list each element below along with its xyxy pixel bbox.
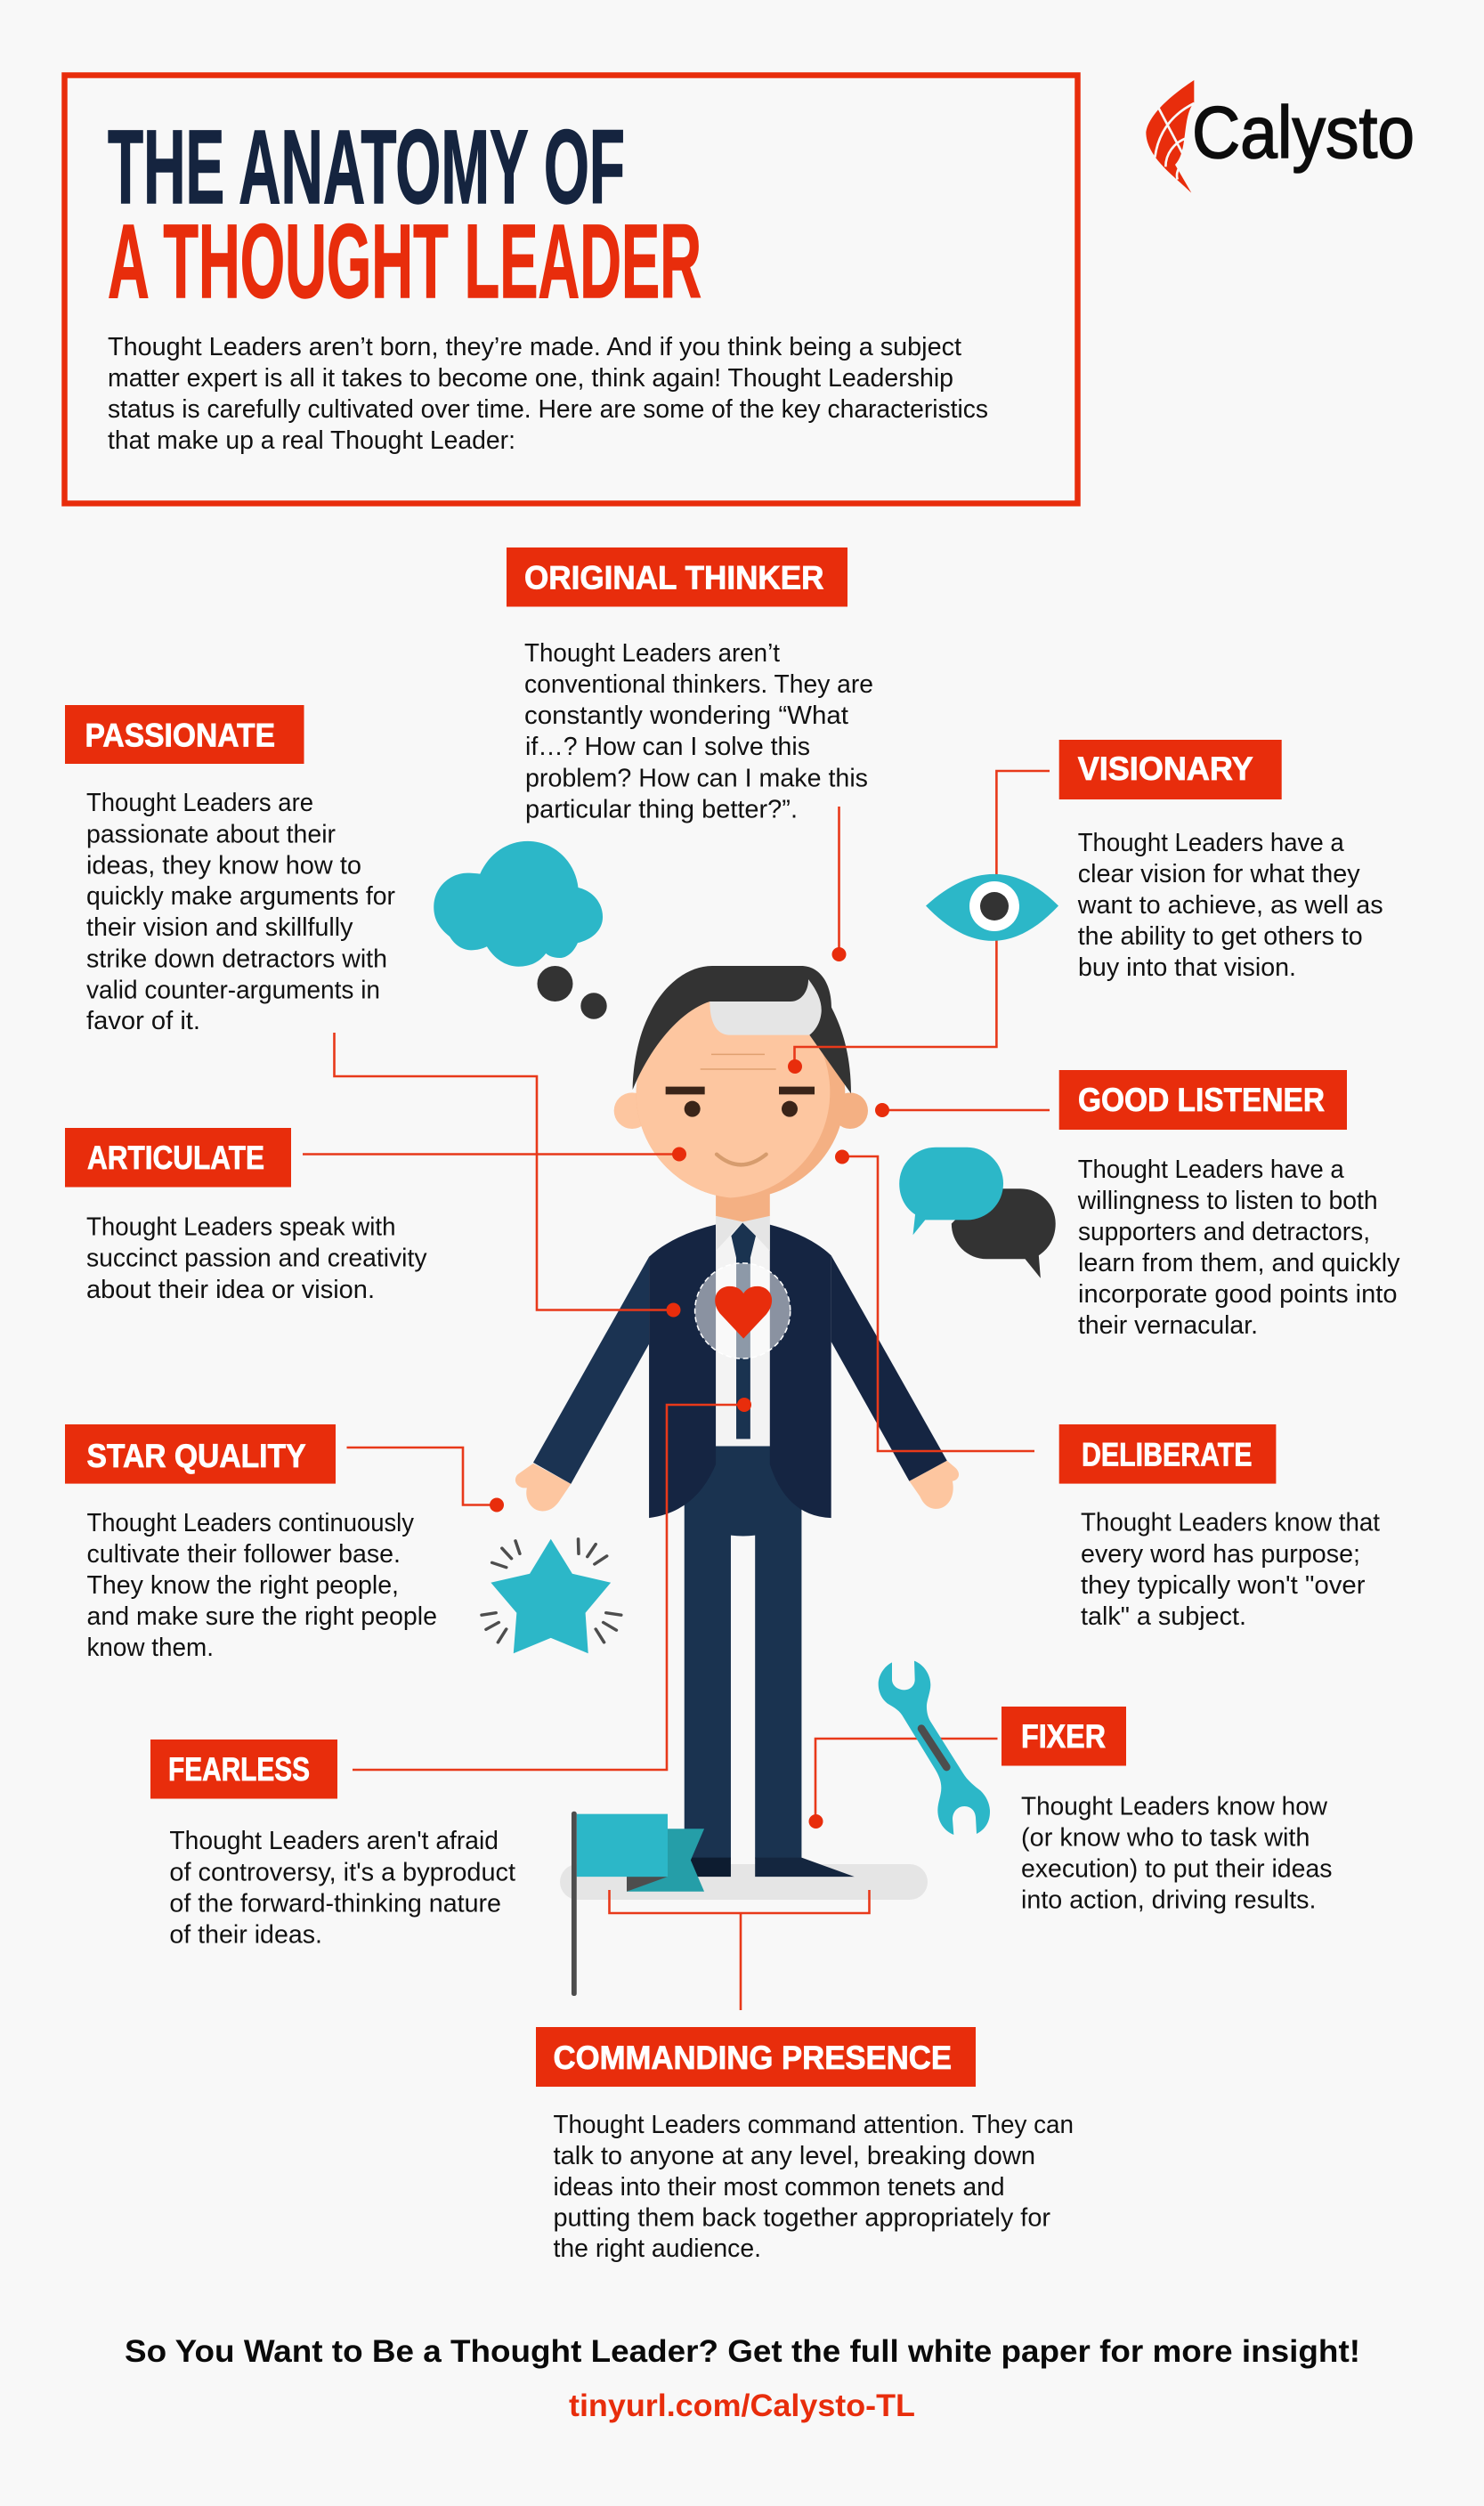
panel: original thinker [507,547,873,824]
text: want to achieve, as well as [1077,891,1383,920]
text [524,639,873,824]
line: deliberate [835,1150,1034,1451]
text: ideas, they know how to [86,851,361,880]
icon: flag [572,1812,704,1996]
footer call to action: So You Want to Be a Thought Leader? Get the full white paper for more insight! [125,2334,1360,2369]
icon: eye [926,874,1058,941]
heading [1059,1070,1347,1130]
text [1081,1508,1380,1631]
icon: heart [715,1286,772,1339]
panel: visionary [1059,740,1383,982]
text: learn from them, and quickly [1078,1249,1400,1277]
heading: ORIGINAL THINKER [524,559,824,596]
heading: PASSIONATE [85,718,275,753]
footer link: tinyurl.com/Calysto-TL [569,2388,915,2423]
text: particular thing better?”. [525,796,798,824]
text: (or know who to task with [1021,1823,1310,1852]
text [1021,1793,1332,1914]
title: A THOUGHT LEADER [108,203,701,320]
line: passionate [335,1033,680,1318]
panel: commanding presence [536,2027,1074,2263]
text: favor of it. [86,1007,200,1035]
text: the right audience. [554,2234,761,2263]
text: putting them back together appropriately for [554,2204,1050,2233]
text: talk" a subject. [1081,1602,1246,1631]
heading: COMMANDING PRESENCE [554,2040,952,2076]
text: constantly wondering “What [524,702,848,730]
suit [515,1188,959,1518]
text: Thought Leaders speak with [86,1212,395,1241]
text: every word has purpose; [1081,1540,1360,1569]
panel: good listener [1059,1070,1400,1340]
text [554,2111,1074,2263]
text: their vernacular. [1078,1311,1258,1340]
text [169,1827,515,1950]
face [636,1002,846,1198]
line: good listener [875,1103,1050,1117]
text: ideas into their most common tenets and [554,2173,1004,2202]
heading [1059,1424,1276,1484]
text: into action, driving results. [1021,1886,1316,1914]
line: original thinker [831,807,846,961]
intro text [108,333,988,455]
left arm [533,1257,649,1484]
shirt [716,1216,770,1446]
jacket [649,1225,831,1518]
text: cultivate their follower base. [87,1540,401,1569]
text: their vision and skillfully [86,913,353,942]
panel: fixer [1001,1707,1332,1914]
logo: Calysto [1192,91,1415,174]
line: fixer [808,1739,997,1829]
text: willingness to listen to both [1077,1187,1378,1215]
text [1077,829,1383,982]
panel: fearless [150,1740,515,1950]
text [1077,1156,1400,1340]
heading: FIXER [1021,1718,1106,1755]
icon: wrench [879,1661,990,1835]
trousers and shoes [644,1440,855,1877]
heart highlight [695,1263,791,1358]
intro text: that make up a real Thought Leader: [108,426,515,455]
text: Thought Leaders aren’t [524,639,780,668]
text: passionate about their [86,821,336,849]
ground shadow [560,1864,928,1900]
title [108,109,701,320]
panel: articulate [65,1128,427,1304]
text: supporters and detractors, [1078,1218,1370,1246]
icon: speech bubbles [899,1148,1056,1278]
logo [1146,80,1415,193]
text: buy into that vision. [1078,953,1296,982]
tie [731,1222,756,1439]
hair [633,966,851,1093]
heading: STAR QUALITY [87,1438,306,1474]
icon: star [482,1539,621,1653]
smile [717,1155,766,1164]
heading: DELIBERATE [1082,1437,1252,1472]
text: if…? How can I solve this [525,733,810,761]
left hand [515,1464,571,1511]
eyebrows [666,1087,815,1094]
title: THE ANATOMY OF [108,109,625,226]
heading [507,547,847,607]
text: Thought Leaders know how [1021,1793,1328,1821]
heading: ARTICULATE [87,1139,264,1176]
text: execution) to put their ideas [1021,1855,1332,1884]
line: star quality [347,1448,504,1512]
text: Thought Leaders aren't afraid [169,1827,499,1855]
header panel [64,75,1077,504]
forehead lines [701,1054,776,1069]
heading [65,705,304,764]
text: Thought Leaders have a [1078,1156,1345,1184]
text: and make sure the right people [87,1602,437,1631]
intro text: status is carefully cultivated over time. Here are some of the key characteristics [108,395,988,424]
text: They know the right people, [87,1571,399,1600]
text: valid counter-arguments in [86,976,380,1004]
panel: star quality [65,1424,437,1662]
text [86,1212,427,1304]
figure: thought leader [515,966,959,1900]
icon: thought cloud [434,841,607,1019]
text: quickly make arguments for [86,882,395,911]
text: of controversy, it's a byproduct [169,1859,515,1887]
ears [614,1092,868,1129]
text: problem? How can I make this [525,764,868,792]
right arm [831,1255,947,1481]
text: about their idea or vision. [86,1276,375,1304]
grey hair tuft [710,979,822,1035]
footer call to action [125,2334,1360,2423]
text [87,1509,437,1662]
heading [65,1128,291,1188]
text: the ability to get others to [1078,922,1363,951]
panel: passionate [65,705,395,1035]
heading [65,1424,336,1484]
text: strike down detractors with [86,945,387,974]
eyes [685,1101,798,1117]
head [614,966,868,1198]
line: fearless [353,1398,751,1770]
heading: VISIONARY [1078,750,1253,787]
text: Thought Leaders have a [1078,829,1345,857]
text: Thought Leaders command attention. They can [554,2111,1074,2139]
heading [1059,740,1282,799]
line: visionary [788,771,1050,1074]
heading: FEARLESS [168,1751,310,1788]
text: they typically won't "over [1081,1571,1366,1600]
text: Thought Leaders are [86,789,313,817]
heading: GOOD LISTENER [1078,1082,1325,1118]
neck [716,1188,770,1221]
collar [716,1216,770,1251]
icon: logo mark [1146,80,1194,193]
heading [150,1740,337,1798]
text: talk to anyone at any level, breaking down [554,2142,1035,2170]
text: clear vision for what they [1078,860,1360,888]
text: know them. [87,1634,214,1662]
heading [1001,1707,1126,1766]
text [86,789,395,1035]
panel: deliberate [1059,1424,1380,1631]
text: of their ideas. [169,1921,322,1950]
text: Thought Leaders know that [1081,1508,1380,1537]
connector lines [303,771,1050,2010]
text: Thought Leaders continuously [87,1509,414,1537]
intro text: Thought Leaders aren’t born, they’re made. And if you think being a subject [108,333,961,361]
right hand [909,1461,959,1509]
text: conventional thinkers. They are [524,670,873,699]
line: commanding presence [609,1890,869,2010]
line: articulate [303,1147,686,1161]
heading [536,2027,976,2087]
text: succinct passion and creativity [86,1245,427,1273]
text: incorporate good points into [1078,1280,1398,1309]
text: of the forward-thinking nature [169,1889,501,1918]
intro text: matter expert is all it takes to become one, think again! Thought Leadership [108,364,953,393]
